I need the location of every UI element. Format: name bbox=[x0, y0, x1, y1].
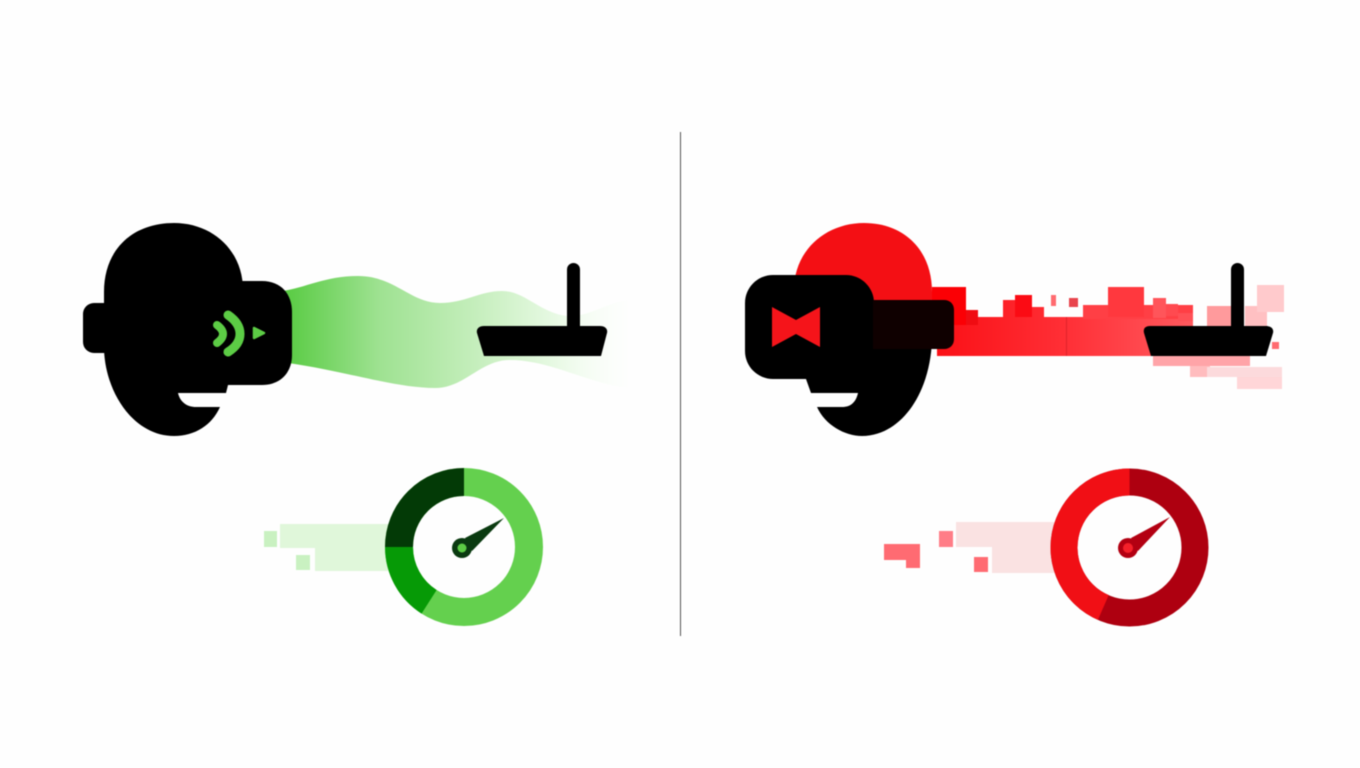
icon: router, red side bbox=[1144, 263, 1273, 356]
red upper head bbox=[794, 223, 932, 310]
speed gauge, green bbox=[399, 482, 529, 612]
green signal wave bbox=[282, 276, 628, 388]
gauge ring bbox=[399, 482, 529, 612]
panel: good connection bbox=[83, 223, 628, 612]
center divider bbox=[680, 132, 681, 636]
panel: poor connection bbox=[745, 223, 1284, 613]
head with headset, green state bbox=[83, 223, 292, 436]
gauge ring bbox=[1064, 482, 1195, 613]
gauge needle bbox=[1118, 517, 1170, 558]
icon: signal waves bbox=[217, 315, 264, 352]
icon: red bow-tie error bbox=[772, 307, 820, 347]
head with headset, red state bbox=[745, 223, 954, 436]
red broken signal bbox=[932, 285, 1284, 389]
visor bbox=[745, 275, 874, 379]
red speed trail bbox=[884, 522, 1056, 573]
headset strap bbox=[873, 300, 954, 349]
black lower head bbox=[800, 340, 932, 436]
head silhouette bbox=[104, 223, 243, 436]
speed gauge, red bbox=[1064, 482, 1195, 613]
ear cup bbox=[83, 303, 123, 353]
icon: router, green side bbox=[477, 263, 607, 356]
green speed trail bbox=[264, 524, 388, 571]
visor bbox=[225, 281, 292, 385]
gauge needle bbox=[452, 518, 504, 558]
